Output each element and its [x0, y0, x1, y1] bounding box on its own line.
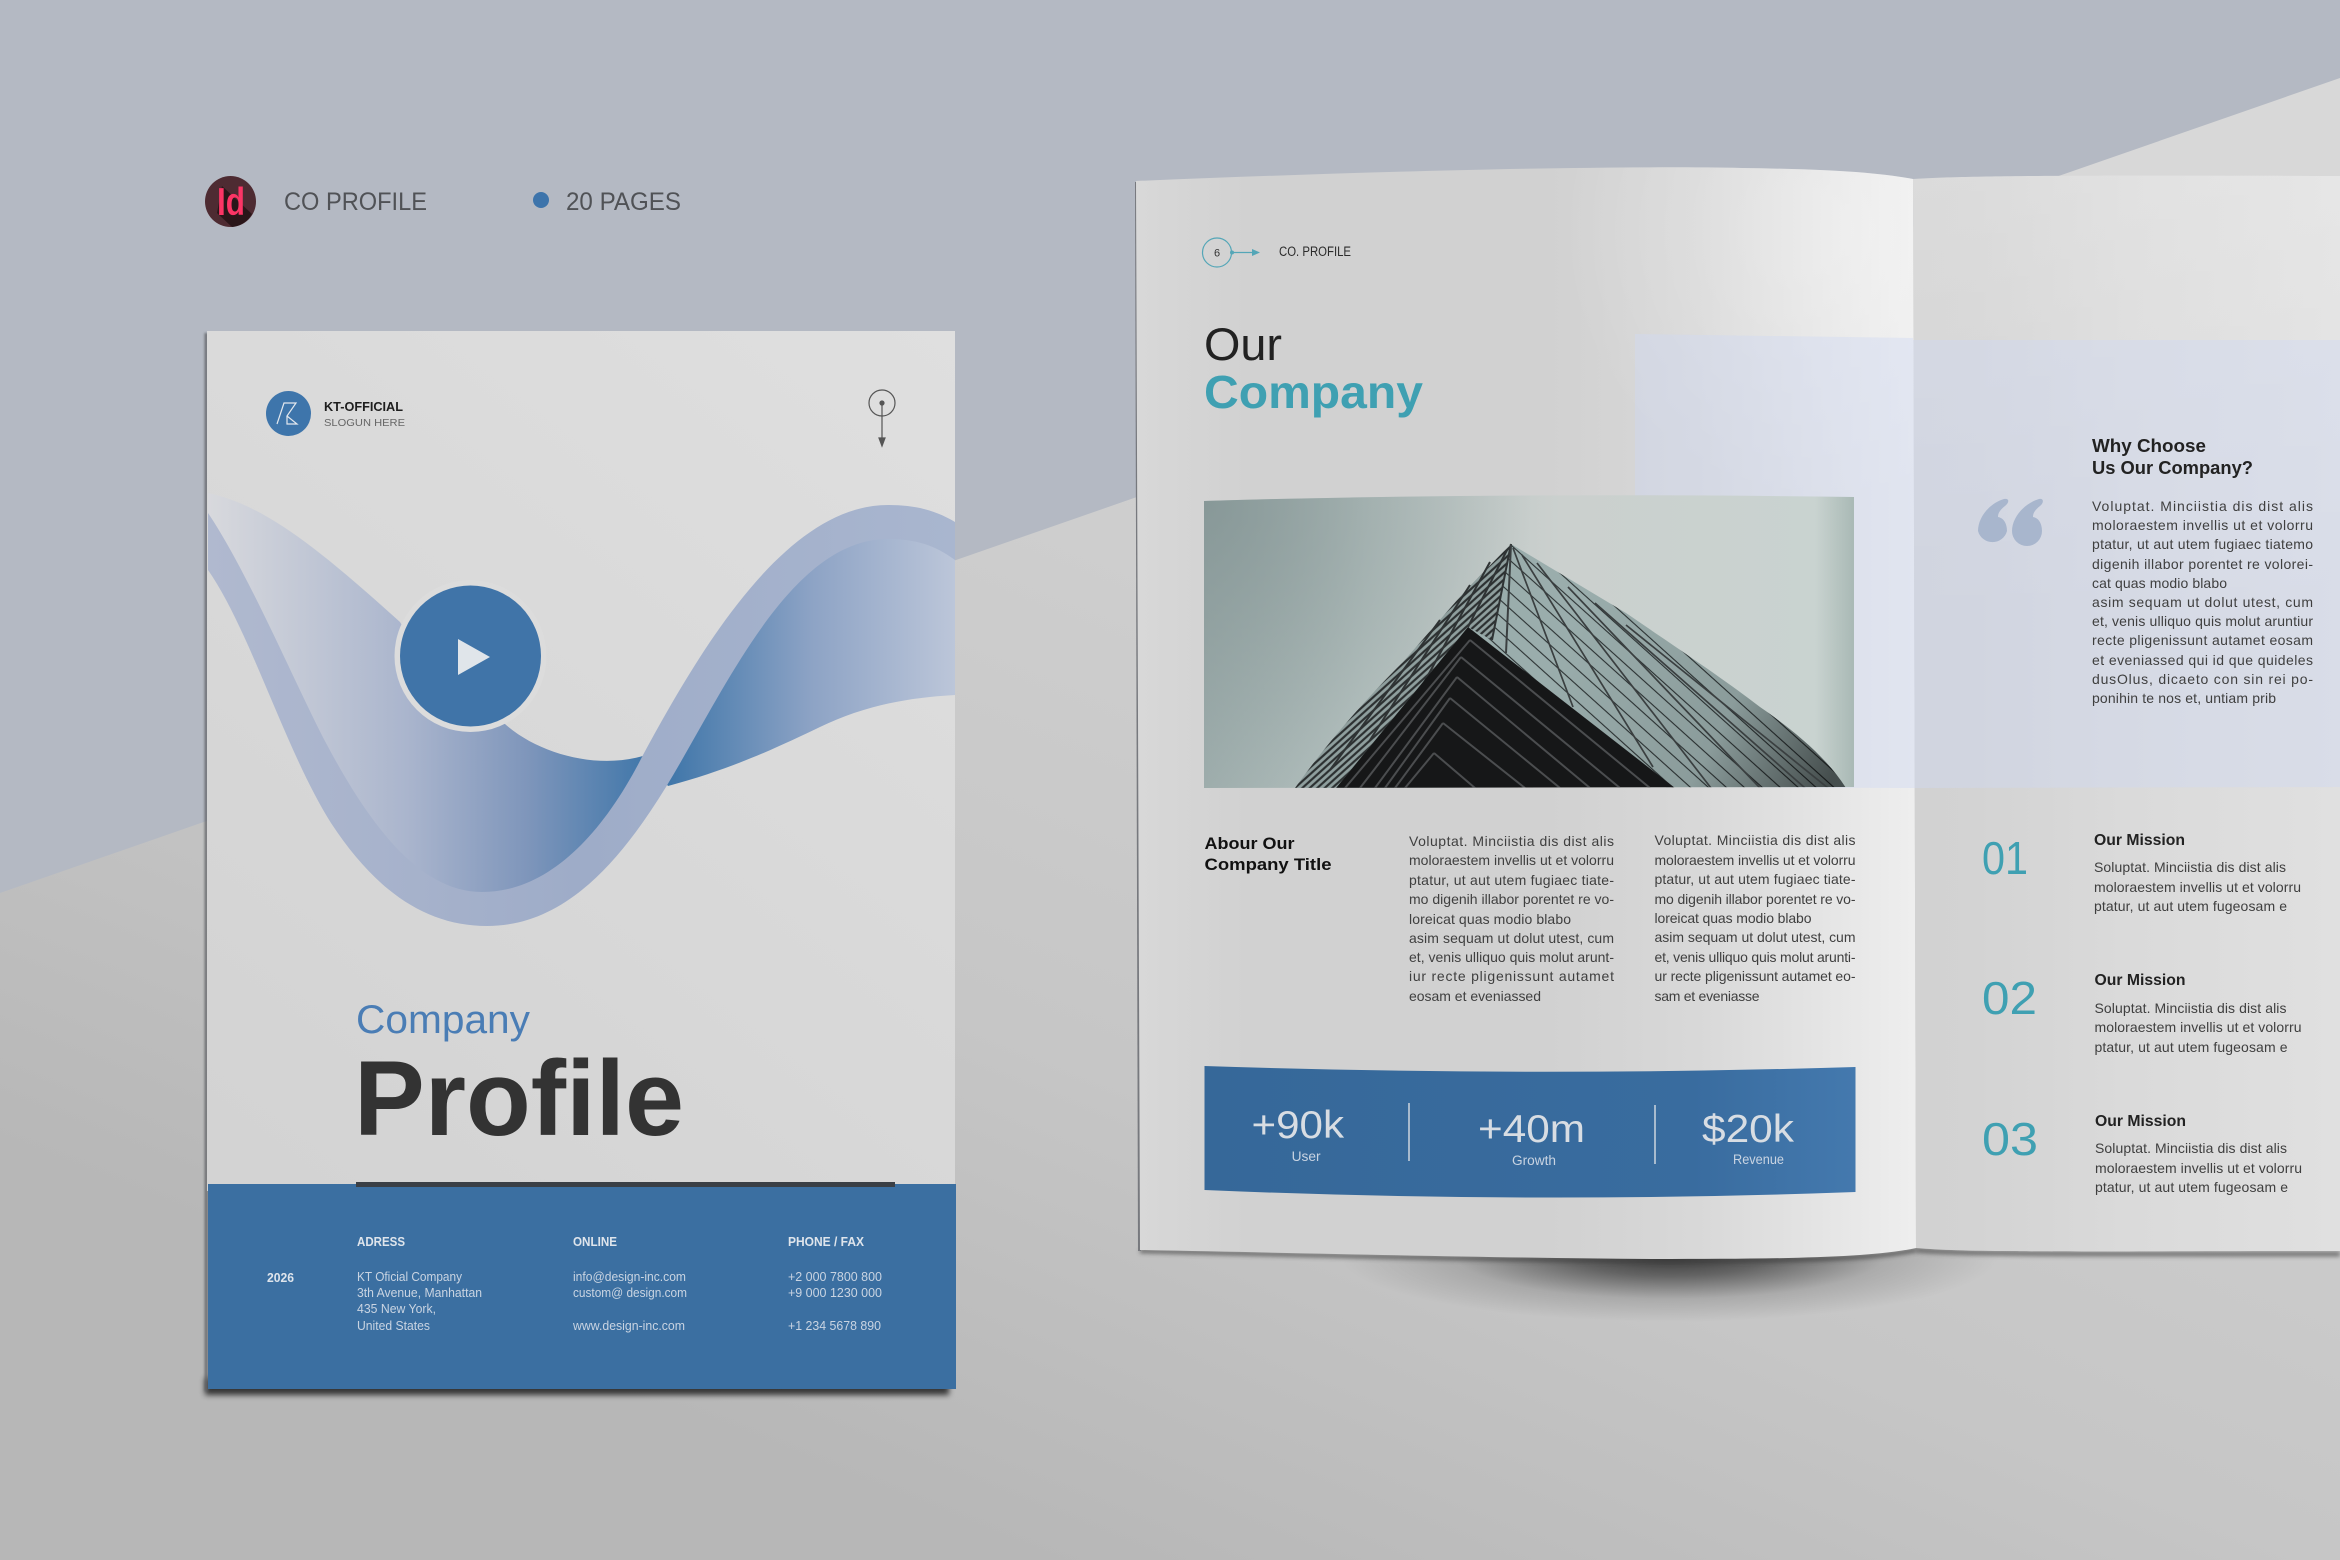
- body paragraph: moloraestem invellis ut et volorru: [2092, 517, 2313, 533]
- icon: play triangle: [458, 639, 490, 675]
- right page: [1913, 176, 2340, 1251]
- body paragraph: digenih illabor porentet re volorei-: [2092, 556, 2313, 572]
- body column one: ptatur, ut aut utem fugiaec tiate-: [1409, 872, 1614, 888]
- icon: page number circle with arrow: [1202, 238, 1260, 267]
- band background: [1204, 1066, 1856, 1198]
- mission item 02: ptatur, ut aut utem fugeosam e: [2094, 1039, 2288, 1055]
- body column one: asim sequam ut dolut utest, cum: [1409, 930, 1614, 946]
- icon: InDesign badge: [205, 176, 256, 227]
- cover paper: [207, 331, 955, 1191]
- stat: growth: [1478, 1108, 1585, 1168]
- header: software tag and page count: [205, 176, 681, 227]
- mission item 01: Soluptat. Minciistia dis dist alis: [2094, 859, 2286, 875]
- spread left edge: [1135, 182, 1141, 1251]
- mission item 02: 02: [1982, 972, 2037, 1024]
- body paragraph: dusOlus, dicaeto con sin rei po-: [2092, 671, 2313, 687]
- stats band: [1204, 1066, 1856, 1198]
- heading line: Company: Company: [1204, 366, 1423, 418]
- body column two: loreicat quas modio blabo: [1654, 910, 1812, 926]
- mission item 01: Our Mission: [2094, 832, 2185, 849]
- cover blue footer band: [208, 1184, 956, 1389]
- right page top highlight: [1913, 176, 2340, 620]
- text block: why choose us: [2092, 436, 2313, 706]
- body column two: sam et eveniasse: [1654, 988, 1760, 1004]
- mission item 03: [1982, 1113, 2302, 1195]
- sub heading: Company Title: [1204, 855, 1332, 874]
- slogan: SLOGUN HERE: [324, 417, 405, 429]
- footer column: address: [357, 1235, 482, 1333]
- body column one: loreicat quas modio blabo: [1409, 911, 1571, 927]
- Company subtitle: Company: [356, 998, 530, 1042]
- body column two: Voluptat. Minciistia dis dist alis: [1654, 832, 1856, 848]
- cover drop shadow: [205, 1378, 949, 1395]
- page heading: [1204, 319, 1423, 418]
- body paragraph: recte pligenissunt autamet eosam: [2092, 632, 2313, 648]
- footer column: address: 3th Avenue, Manhattan: [357, 1286, 482, 1300]
- body paragraph: ponihin te nos et, untiam prib: [2092, 690, 2276, 706]
- body column two: moloraestem invellis ut et volorru: [1654, 852, 1856, 868]
- play button disc: [400, 586, 541, 726]
- body column one: et, venis ulliquo quis molut arunt-: [1409, 949, 1614, 965]
- body column two: ur recte pligenissunt autamet eo-: [1654, 968, 1856, 984]
- label: CO PROFILE: CO PROFILE: [284, 188, 427, 216]
- cover divider rule: [356, 1182, 895, 1187]
- footer column: online: custom@ design.com: [573, 1286, 687, 1300]
- footer column: address: ADRESS: [357, 1235, 405, 1249]
- sub heading: [1204, 834, 1332, 874]
- footer column: phone and fax: +1 234 5678 890: [788, 1319, 881, 1333]
- body paragraph: cat quas modio blabo: [2092, 575, 2227, 591]
- cover title: [354, 998, 684, 1158]
- body column two: et, venis ulliquo quis molut arunti-: [1654, 949, 1856, 965]
- brand name: KT-OFFICIAL: [324, 399, 403, 414]
- stat: users: User: [1292, 1149, 1321, 1164]
- sub heading: Abour Our: [1204, 834, 1295, 853]
- stat: revenue: $20k: [1702, 1108, 1795, 1151]
- Profile title: Profile: [354, 1038, 684, 1158]
- body paragraph: ptatur, ut aut utem fugiaec tiatemo: [2092, 536, 2313, 552]
- footer column: address: United States: [357, 1319, 430, 1333]
- icon: pin with down arrow: [869, 390, 895, 446]
- wave: right gradient ribbon: [660, 522, 955, 786]
- body column one: Voluptat. Minciistia dis dist alis: [1409, 833, 1614, 849]
- cover footer year: 2026: [267, 1271, 294, 1285]
- icon: KT logo: [266, 391, 311, 436]
- mission item 02: moloraestem invellis ut et volorru: [2094, 1019, 2302, 1035]
- body column one: eosam et eveniassed: [1409, 988, 1541, 1004]
- thin contact shadow under left page: [1140, 1250, 1916, 1261]
- photo sky dark corner: [1204, 496, 1482, 738]
- wave graphic: [208, 493, 955, 926]
- left page: [1136, 167, 1916, 1259]
- photo sky: [1204, 490, 1854, 790]
- building right face: [1468, 544, 1846, 788]
- mission item 03: Soluptat. Minciistia dis dist alis: [2095, 1140, 2287, 1156]
- heading: Us Our Company?: [2092, 458, 2253, 478]
- footer column: phone and fax: +2 000 7800 800: [788, 1270, 882, 1284]
- stat: revenue: [1702, 1108, 1795, 1167]
- footer column: online: ONLINE: [573, 1235, 617, 1249]
- mission item 01: moloraestem invellis ut et volorru: [2094, 879, 2301, 895]
- body column one: [1409, 833, 1614, 1004]
- mission item 01: ptatur, ut aut utem fugeosam e: [2094, 898, 2287, 914]
- label: 20 PAGES: 20 PAGES: [566, 188, 681, 216]
- footer column: phone and fax: [788, 1235, 882, 1333]
- wave: left gradient ribbon: [208, 493, 662, 902]
- footer column: address: KT Oficial Company: [357, 1270, 463, 1284]
- body paragraph: et eveniassed qui id que quideles: [2092, 652, 2313, 668]
- tinted blue panel: [1635, 334, 2340, 788]
- body column two: mo digenih illabor porentet re vo-: [1654, 891, 1856, 907]
- mission item 03: ptatur, ut aut utem fugeosam e: [2095, 1179, 2288, 1195]
- thin contact shadow under right page: [1916, 1250, 2340, 1254]
- building left face: [1295, 544, 1511, 788]
- page marker: [1202, 238, 1351, 267]
- body column one: moloraestem invellis ut et volorru: [1409, 852, 1614, 868]
- stat: growth: +40m: [1478, 1108, 1585, 1151]
- body column two: ptatur, ut aut utem fugiaec tiate-: [1654, 871, 1856, 887]
- building dark soffit: [1336, 627, 1675, 788]
- heading: Why Choose: [2092, 436, 2206, 456]
- cover left edge shadow: [204, 333, 208, 1391]
- body column one: iur recte pligenissunt autamet: [1409, 968, 1614, 984]
- body paragraph: asim sequam ut dolut utest, cum: [2092, 594, 2313, 610]
- spread shadow under left page: [1340, 1190, 2000, 1322]
- footer column: online: www.design-inc.com: [572, 1319, 685, 1333]
- footer column: online: info@design-inc.com: [573, 1270, 686, 1284]
- mission item 01: 01: [1982, 832, 2028, 884]
- mission item 02: [1982, 972, 2302, 1055]
- icon: quotation mark: [1978, 499, 2043, 546]
- footer column: phone and fax: +9 000 1230 000: [788, 1286, 882, 1300]
- stat: users: +90k: [1252, 1104, 1345, 1147]
- heading line: Our: Our: [1204, 319, 1282, 370]
- heading: [2092, 436, 2253, 478]
- stat: users: [1252, 1104, 1345, 1164]
- panel: brochure cover: [204, 331, 956, 1395]
- footer column: phone and fax: PHONE / FAX: [788, 1235, 865, 1249]
- left page spine highlight: [1560, 160, 1916, 520]
- mission item 02: Our Mission: [2094, 972, 2186, 989]
- mission item 03: 03: [1982, 1113, 2038, 1165]
- stat: growth: Growth: [1512, 1153, 1556, 1168]
- mission item 03: moloraestem invellis ut et volorru: [2095, 1160, 2302, 1176]
- footer column: address: 435 New York,: [357, 1302, 436, 1316]
- mission item 01: [1982, 832, 2301, 914]
- icon: InDesign badge: Id: [217, 181, 245, 224]
- body paragraph: et, venis ulliquo quis molut aruntiur: [2092, 613, 2313, 629]
- panel: open brochure spread: [1135, 160, 2340, 1322]
- play button ring: [394, 580, 546, 732]
- body column two: asim sequam ut dolut utest, cum: [1654, 929, 1856, 945]
- body paragraph: Voluptat. Minciistia dis dist alis: [2092, 498, 2313, 514]
- icon: blue dot: [533, 192, 549, 208]
- body column two: [1654, 832, 1856, 1004]
- photo: skyscraper from below: [1204, 490, 1854, 790]
- footer column: online: [572, 1235, 687, 1333]
- body column one: mo digenih illabor porentet re vo-: [1409, 891, 1614, 907]
- mission item 03: Our Mission: [2095, 1113, 2186, 1130]
- text block: about company: [1204, 832, 1856, 1004]
- icon: page number circle with arrow: 6: [1214, 248, 1220, 260]
- cover logo block: [266, 391, 405, 436]
- mission item 02: Soluptat. Minciistia dis dist alis: [2094, 1000, 2286, 1016]
- body paragraph: [2092, 498, 2313, 706]
- stat: revenue: Revenue: [1733, 1152, 1784, 1167]
- running header: CO. PROFILE: [1279, 244, 1351, 259]
- wave: pale outer band: [208, 505, 955, 926]
